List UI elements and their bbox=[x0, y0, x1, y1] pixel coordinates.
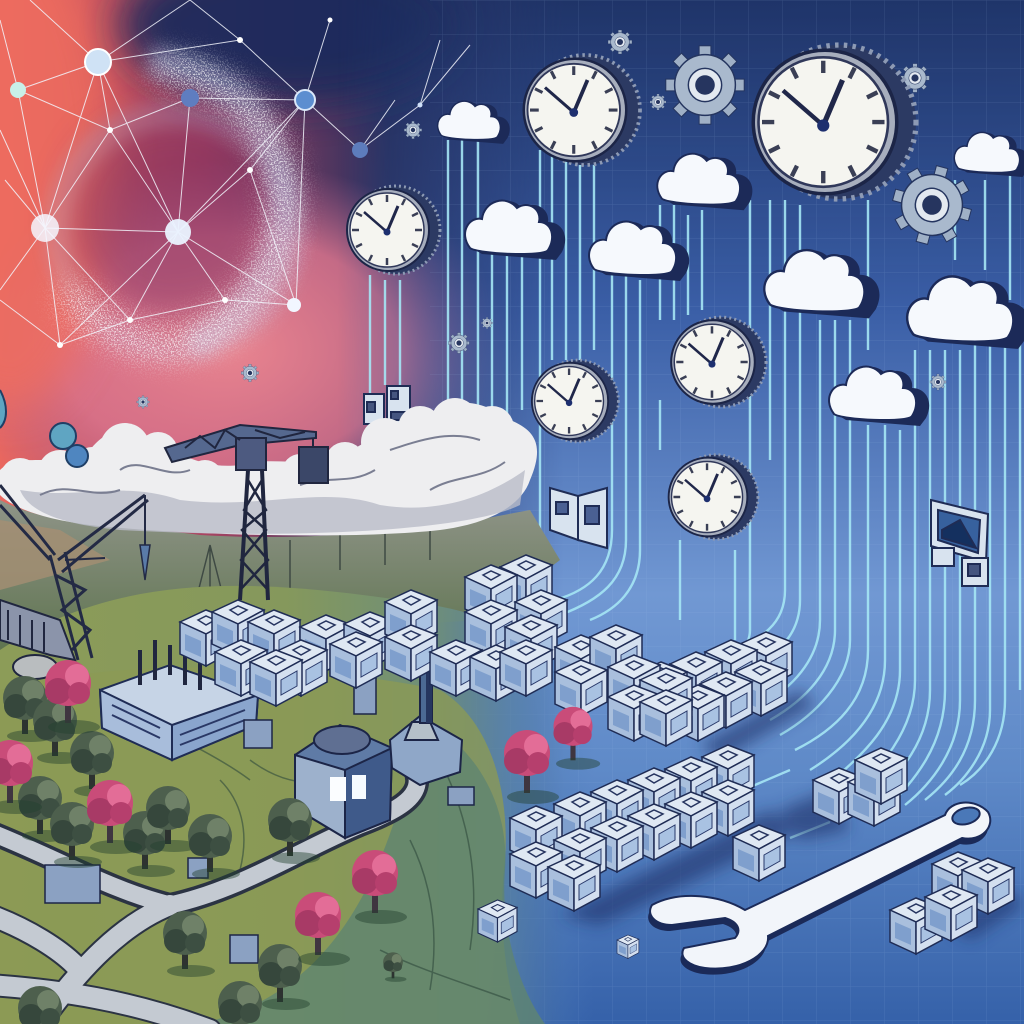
facility far left bbox=[0, 600, 75, 679]
cloud 7 bbox=[907, 276, 1024, 349]
crane left bbox=[0, 485, 150, 660]
ground landscape bbox=[0, 586, 1024, 1024]
clock top bbox=[524, 55, 640, 165]
crane large bbox=[165, 425, 328, 600]
factory main bbox=[100, 640, 258, 760]
clock left bbox=[347, 186, 440, 274]
floating orbs bbox=[0, 390, 88, 467]
cloud 1 bbox=[438, 101, 510, 144]
clock low bbox=[669, 455, 758, 539]
road stroke outlines bbox=[0, 770, 417, 1024]
glowing network globe bbox=[0, 0, 470, 350]
small boxes right bbox=[478, 748, 1014, 959]
cloud 4 bbox=[657, 154, 752, 210]
cloud 8 bbox=[829, 367, 929, 426]
panel screen right bbox=[931, 500, 988, 586]
network connections bbox=[0, 0, 470, 345]
panel pair mid bbox=[550, 488, 607, 548]
gear small bbox=[449, 333, 469, 353]
gears bbox=[137, 30, 980, 408]
gear large top bbox=[666, 46, 744, 124]
clocks bbox=[347, 45, 916, 539]
block shadows bbox=[560, 690, 1024, 940]
long row foreground bbox=[510, 745, 754, 911]
green trees bbox=[3, 676, 406, 1024]
row middle bbox=[608, 632, 792, 746]
gear small bbox=[241, 364, 259, 382]
distant hills bbox=[0, 500, 560, 650]
wrench bbox=[648, 803, 990, 975]
gear small bbox=[930, 374, 946, 390]
clock mid right bbox=[671, 317, 766, 407]
road surfaces bbox=[0, 770, 417, 1024]
floating panels bbox=[364, 386, 988, 586]
small vent bbox=[45, 664, 474, 963]
data center buildings bbox=[0, 600, 474, 963]
gear small top bbox=[608, 30, 632, 54]
gear large right bbox=[884, 157, 980, 253]
cluster centre left bbox=[180, 590, 437, 706]
cloud 6 bbox=[764, 250, 879, 318]
data stream lines bbox=[370, 140, 1020, 870]
clouds horizon band bbox=[0, 398, 537, 535]
tower pedestal bbox=[390, 645, 462, 785]
gear small bbox=[481, 317, 493, 329]
cloud 5 bbox=[954, 132, 1024, 177]
pink trees bbox=[0, 660, 600, 966]
roads bbox=[0, 770, 417, 1024]
trees bbox=[0, 660, 600, 1024]
small hut with window bbox=[295, 725, 392, 838]
gear small bbox=[404, 121, 422, 139]
clock mid bbox=[532, 360, 618, 442]
clouds with streams bbox=[438, 101, 1024, 426]
panel pair upper bbox=[364, 386, 410, 432]
box clusters bbox=[180, 555, 1014, 959]
gear small bbox=[137, 396, 149, 408]
clock large bbox=[753, 45, 916, 199]
cloud 3 bbox=[589, 222, 689, 281]
sparkle ring bbox=[57, 62, 293, 350]
gear small bbox=[650, 94, 666, 110]
cloud 2 bbox=[465, 201, 565, 260]
gear small right bbox=[901, 64, 929, 92]
stack centre bbox=[430, 555, 642, 716]
network nodes bbox=[10, 18, 422, 348]
